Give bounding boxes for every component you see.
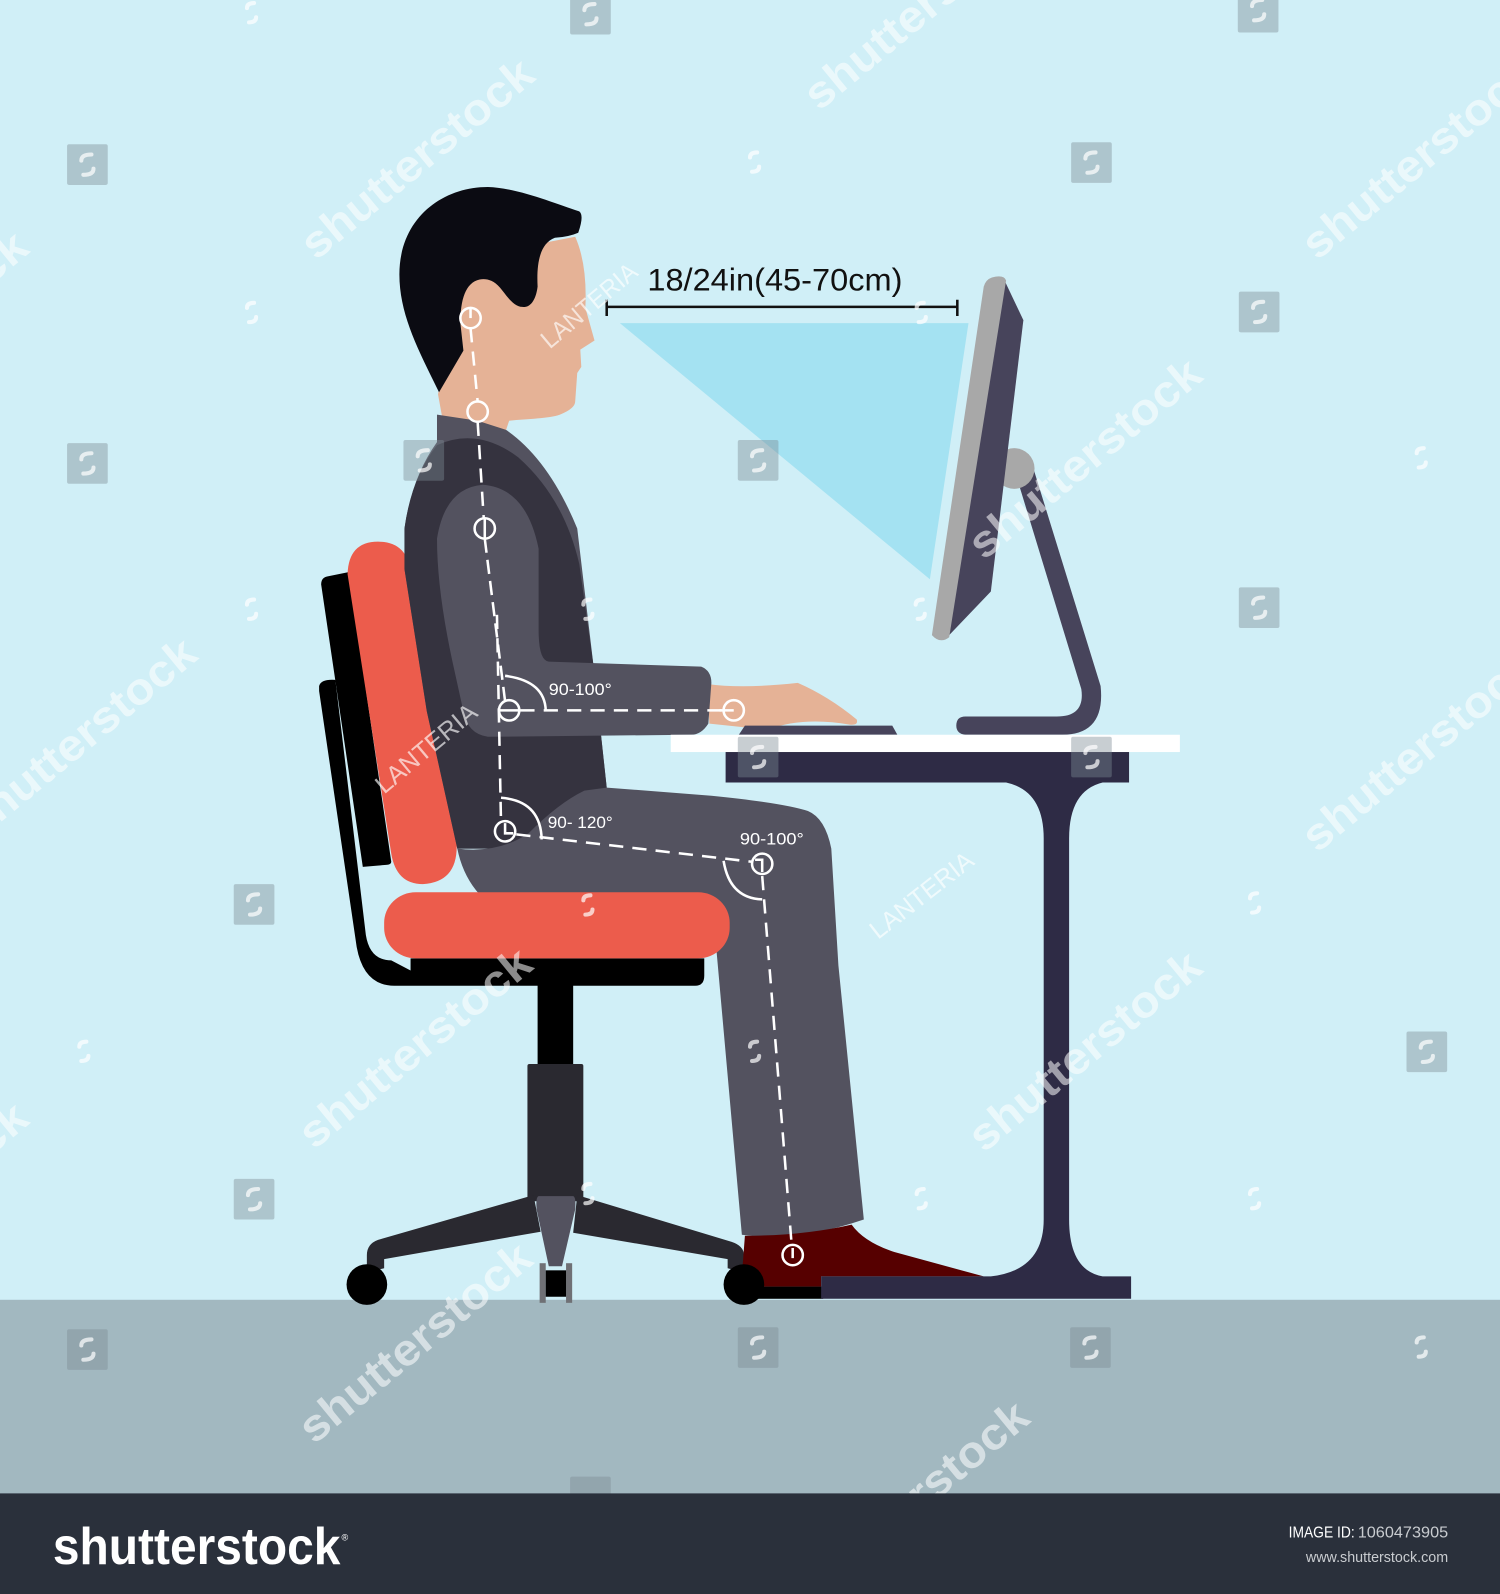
angle arcs xyxy=(501,676,762,899)
image id: IMAGE ID: xyxy=(1289,1525,1355,1542)
left caster xyxy=(347,1264,387,1305)
red seat cushion xyxy=(384,892,730,958)
angle label: elbow: 90-100° xyxy=(549,681,612,699)
gas lift xyxy=(538,984,573,1067)
footer logo: shutterstock xyxy=(53,1517,341,1575)
watermark: shutterstock text: shutterstock xyxy=(959,349,1211,569)
chair back and frame xyxy=(319,542,744,1305)
posture guide lines xyxy=(460,308,803,1265)
man xyxy=(399,187,984,1299)
footer bar: 1060473905 xyxy=(1358,1525,1448,1542)
watermark: LANTERIA text: LANTERIA xyxy=(865,846,979,945)
watermark: shutterstock text: shutterstock xyxy=(291,49,544,269)
shoe xyxy=(742,1225,984,1287)
watermark: LANTERIA text: LANTERIA xyxy=(370,698,483,799)
red backrest xyxy=(348,542,457,884)
footer bar xyxy=(0,1493,1500,1594)
watermark: bracket glyph marks xyxy=(79,0,1433,1360)
face and neck xyxy=(438,237,595,430)
angle label: hip: 90- 120° xyxy=(548,814,613,832)
central caster xyxy=(540,1263,546,1303)
floor xyxy=(0,1300,1500,1494)
watermark: shutterstock text: shutterstock xyxy=(289,1233,542,1453)
front caster xyxy=(724,1264,764,1305)
star base xyxy=(367,1195,541,1272)
suit torso xyxy=(404,415,607,849)
watermark: LANTERIA text: LANTERIA xyxy=(536,258,643,354)
angle label: knee: 90-100° xyxy=(740,831,804,849)
distance measurement xyxy=(607,262,957,316)
registered mark: ® xyxy=(341,1533,348,1543)
monitor xyxy=(932,276,1101,735)
watermark: LANTERIA text xyxy=(370,258,979,945)
watermark: shutterstock text: shutterstock xyxy=(959,941,1211,1161)
hand xyxy=(707,683,857,730)
chair back upper frame xyxy=(321,572,391,867)
keyboard xyxy=(739,726,897,735)
chair back lower frame and seat pan xyxy=(319,680,704,986)
white desktop xyxy=(671,735,1180,752)
joint markers xyxy=(460,308,803,1265)
viewing cone triangle xyxy=(620,323,968,579)
hair xyxy=(399,187,582,392)
trousers xyxy=(457,788,864,1238)
watermark: shutterstock text: shutterstock xyxy=(289,938,542,1158)
arm sleeve xyxy=(437,485,711,737)
website: www.shutterstock.com xyxy=(1305,1550,1448,1566)
desk legs and frame xyxy=(726,752,1131,1299)
distance measurement: 18/24in(45-70cm) xyxy=(647,262,902,298)
desk xyxy=(671,735,1180,1299)
